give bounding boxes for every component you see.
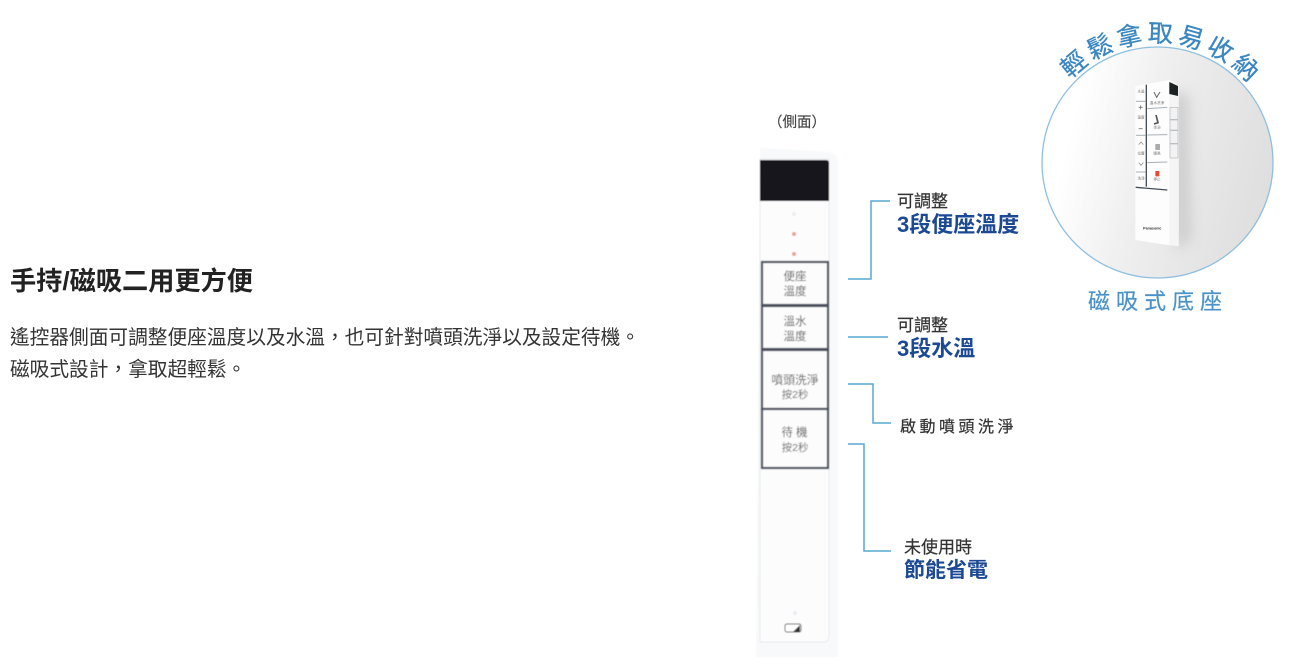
- remote shadow: [1172, 90, 1190, 250]
- button: water temperature: 溫度: [784, 329, 807, 343]
- callout: seat temperature: [848, 192, 1019, 279]
- button: nozzle cleaning: 按2秒: [782, 388, 809, 401]
- remote front view: 停止: [1153, 177, 1161, 182]
- callout: nozzle cleaning: 啟動噴頭洗淨: [900, 418, 1017, 436]
- remote front view: 洗淨: [1137, 175, 1145, 180]
- remote body: [756, 148, 838, 657]
- side label: （側面）: [768, 114, 826, 131]
- button: seat temperature: 溫度: [784, 284, 807, 298]
- remote front view: 水量: [1137, 89, 1145, 94]
- remote front view: 位置: [1137, 151, 1145, 156]
- icon: battery: [785, 624, 801, 632]
- callout: water temperature: 可調整: [897, 316, 948, 335]
- button: standby: 按2秒: [782, 441, 809, 454]
- description text: [10, 326, 640, 381]
- callout: energy saving: 未使用時: [904, 537, 972, 557]
- callout: water temperature: 3段水溫: [897, 336, 975, 361]
- curved caption: 輕鬆拿取易收納: [1059, 22, 1258, 82]
- remote front view: 溫水洗淨: [1150, 100, 1165, 105]
- heading: 手持/磁吸二用更方便: [10, 266, 253, 296]
- callout: seat temperature: 3段便座溫度: [897, 212, 1019, 237]
- remote front view: 溫度: [1137, 114, 1145, 119]
- callout: seat temperature: 可調整: [897, 192, 948, 211]
- button: standby: [762, 409, 828, 468]
- remote control side view: [756, 148, 838, 657]
- button: water temperature: [762, 306, 828, 349]
- callout: energy saving: [848, 444, 988, 582]
- description text: 遙控器側面可調整便座溫度以及水溫，也可針對噴頭洗淨以及設定待機。: [10, 327, 640, 349]
- button: standby: 待機: [782, 425, 810, 439]
- magnetic base circle: [1042, 47, 1273, 278]
- remote face: [760, 159, 829, 642]
- callout: water temperature: [848, 316, 975, 361]
- indicator lights: [792, 212, 797, 615]
- remote front view: 暖風: [1153, 151, 1161, 156]
- button: seat temperature: 便座: [784, 269, 806, 283]
- remote front view: Panasonic: [1143, 226, 1161, 230]
- button: nozzle cleaning: [762, 350, 828, 409]
- base caption: 磁吸式底座: [1088, 289, 1228, 314]
- callout: energy saving: 節能省電: [904, 559, 988, 582]
- callout: nozzle cleaning: [848, 384, 1017, 436]
- display screen: [760, 160, 829, 201]
- remote front view: [1135, 80, 1179, 246]
- description text: 磁吸式設計，拿取超輕鬆。: [10, 359, 246, 381]
- button: water temperature: 溫水: [784, 314, 807, 328]
- button: seat temperature: [762, 262, 828, 305]
- remote front view: 坐浴: [1153, 125, 1161, 130]
- button: nozzle cleaning: 噴頭洗淨: [771, 373, 819, 387]
